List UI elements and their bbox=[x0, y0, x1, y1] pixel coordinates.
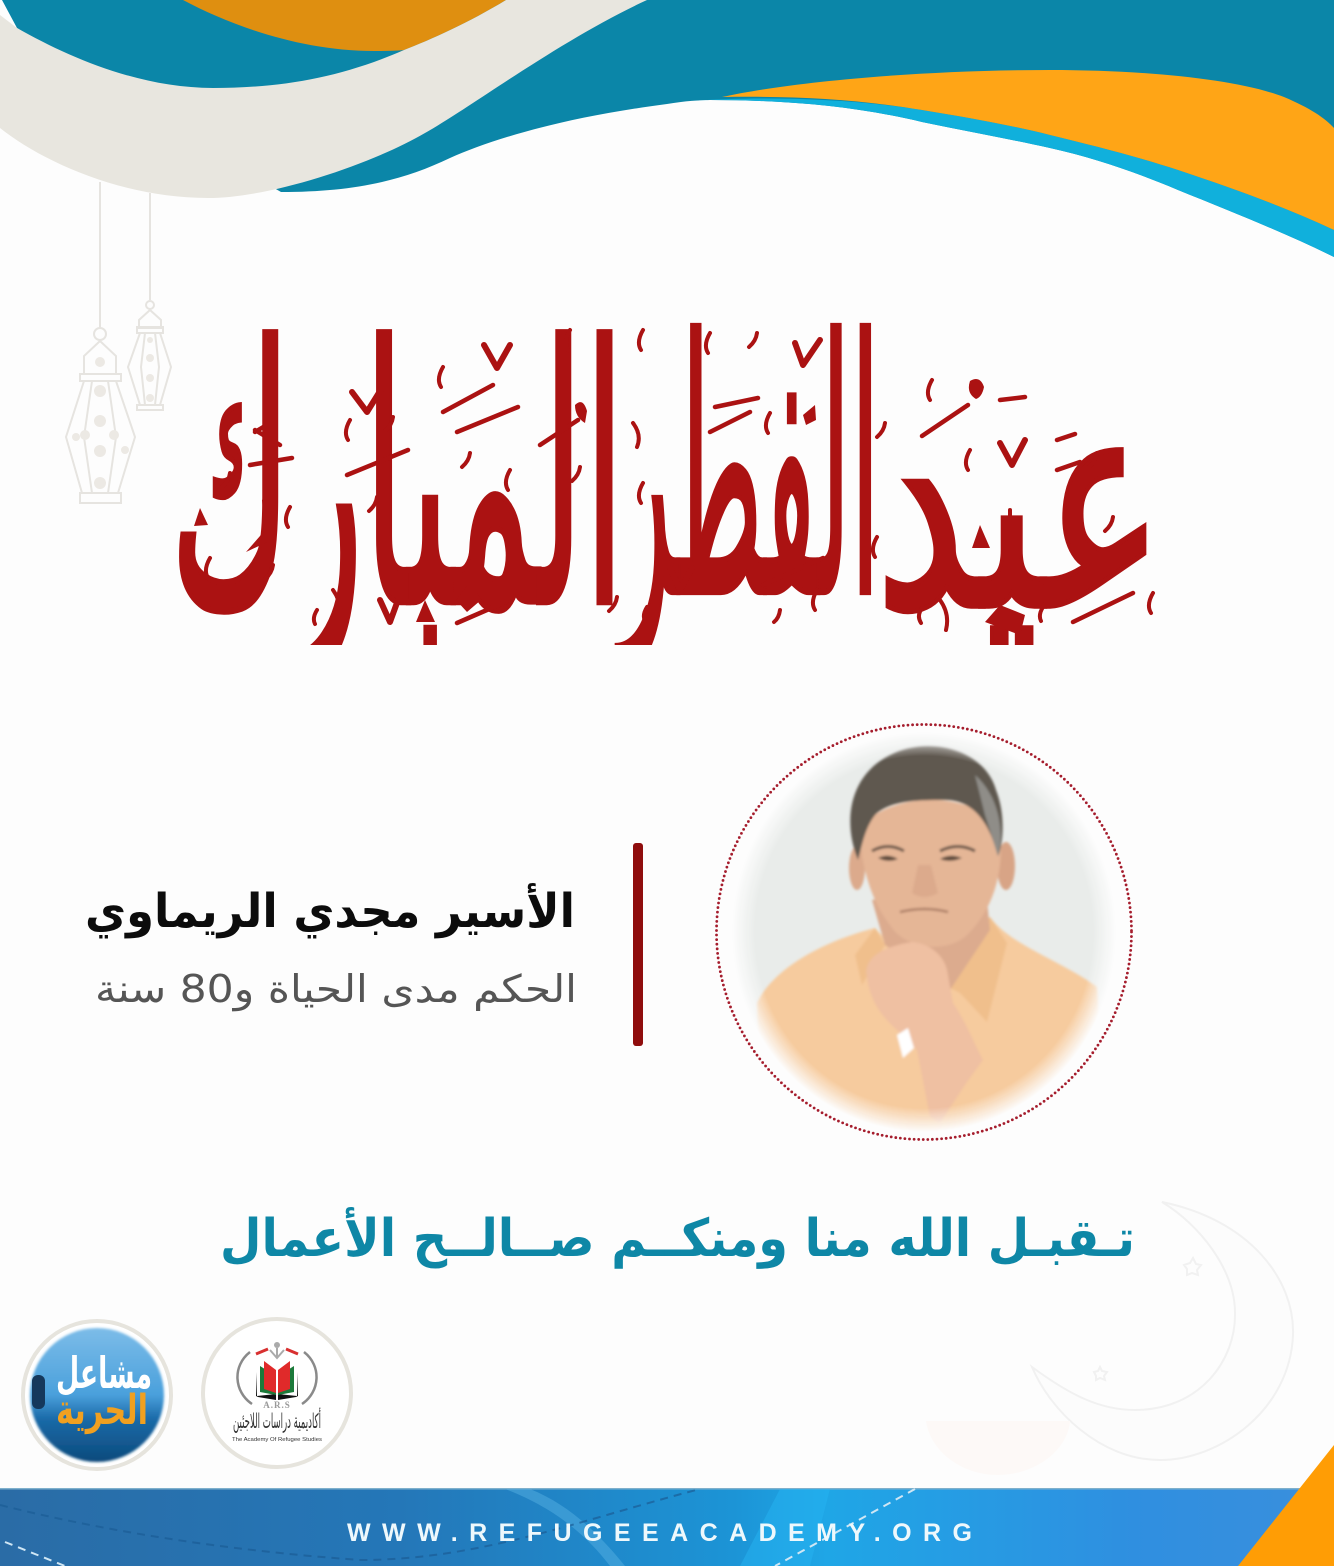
face bbox=[860, 800, 1001, 947]
sentence line: الحكم مدى الحياة و80 سنة bbox=[95, 967, 577, 1012]
crescent moon bbox=[926, 1202, 1293, 1475]
eyes bbox=[878, 856, 962, 861]
lanterns bbox=[66, 182, 171, 503]
footer band bbox=[0, 1445, 1334, 1566]
website address: WWW.REFUGEEACADEMY.ORG bbox=[347, 1519, 972, 1547]
word: al-mubarak: المبارك bbox=[170, 273, 625, 691]
top wave header bbox=[0, 0, 1334, 257]
logo: academy of refugee studies: A.R.S bbox=[263, 1400, 291, 1410]
lantern pattern bbox=[72, 357, 129, 489]
shirt bbox=[756, 920, 1098, 1130]
calligraphy title bbox=[179, 322, 1156, 645]
logo: academy of refugee studies: أكاديمية دراسات اللاجئين bbox=[233, 1407, 321, 1433]
dark orange wave bbox=[183, 0, 506, 51]
logo: freedom torches: الحرية bbox=[56, 1386, 148, 1434]
teal wave bbox=[2, 0, 1334, 257]
dotted ring bbox=[716, 724, 1132, 1140]
decorative calligraphy marks bbox=[206, 330, 1153, 630]
vertical divider bbox=[633, 843, 643, 1046]
orange wave bbox=[722, 70, 1334, 230]
stars bbox=[1094, 1258, 1201, 1380]
large lantern bbox=[66, 182, 135, 503]
cuff bbox=[945, 1060, 1023, 1130]
footer dashes bbox=[5, 1489, 915, 1566]
prisoner name: الأسير مجدي الريماوي bbox=[85, 882, 575, 939]
brows bbox=[872, 846, 975, 851]
word: eid: عيد bbox=[875, 327, 1165, 677]
hair bbox=[850, 746, 1003, 860]
ears bbox=[849, 846, 865, 890]
orange corner bbox=[1238, 1445, 1334, 1566]
pale blob bbox=[926, 1421, 1070, 1475]
book bbox=[256, 1372, 298, 1400]
wreath bbox=[237, 1352, 317, 1404]
small lantern bbox=[128, 193, 171, 410]
arm and fist bbox=[866, 942, 983, 1123]
mouth bbox=[900, 909, 948, 912]
neck bbox=[871, 898, 990, 988]
blessing line: تـقبـل الله منا ومنكــم صــالــح الأعمال bbox=[220, 1206, 1135, 1269]
beige wave bbox=[0, 0, 647, 198]
light blue stripe bbox=[690, 98, 1334, 257]
word: al-fitr: الفطر bbox=[615, 267, 880, 679]
logo: academy of refugee studies: The Academy Of Refugee Studies bbox=[232, 1437, 322, 1443]
footer light streak bbox=[505, 1489, 625, 1566]
portrait with dotted ring bbox=[716, 724, 1132, 1150]
logo: academy of refugee studies bbox=[203, 1319, 351, 1467]
nose bbox=[913, 866, 936, 896]
photo bbox=[742, 742, 1106, 1130]
logo: freedom torches: مشاعل bbox=[56, 1348, 152, 1398]
logo: freedom torches bbox=[23, 1321, 171, 1469]
